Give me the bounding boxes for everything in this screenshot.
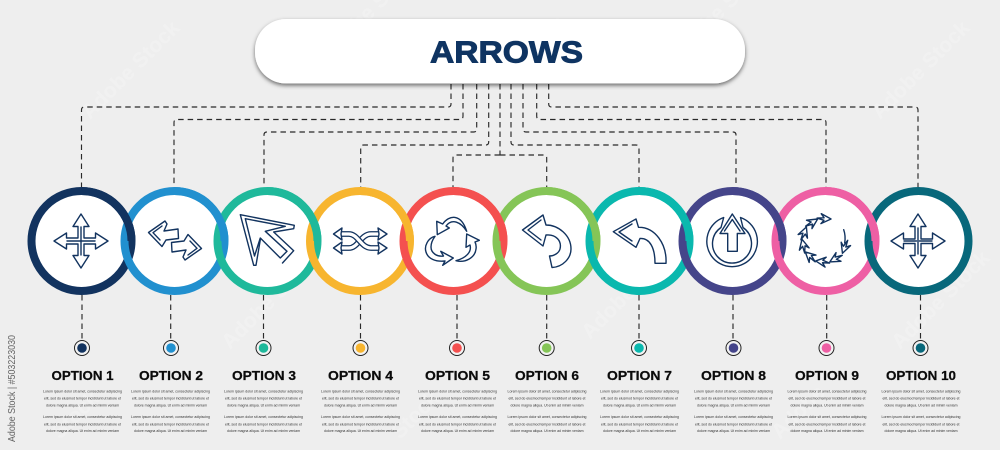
- text block: option 2: dolore magna aliqua. Ut enim ad minim veniam: [134, 402, 208, 408]
- text block: option 5: OPTION 5: [425, 368, 490, 383]
- text block: option 7: dolore magna aliqua. Ut enim ad minim veniam: [603, 428, 677, 433]
- text block: option 6: dolore magna aliqua. Ut enim ad minim veniam: [510, 402, 584, 408]
- text block: option 10: Lorem ipsum dolor sit amet, consectetur adipiscing: [882, 388, 960, 394]
- text block: option 10: dolore magna aliqua. Ut enim ad minim veniam: [884, 402, 958, 408]
- text block: option 6: Lorem ipsum dolor sit amet, consectetur adipiscing: [508, 388, 586, 394]
- text block: option 7: dolore magna aliqua. Ut enim ad minim veniam: [603, 402, 677, 408]
- text block: option 3: Lorem ipsum dolor sit amet, consectetur adipiscing: [224, 388, 303, 394]
- icon: curved left arrow: [613, 219, 666, 263]
- text block: option 5: elit, sed do eiusmod tempor incididunt ut labore et: [419, 395, 497, 400]
- text block: option 2: elit, sed do eiusmod tempor incididunt ut labore et: [132, 421, 210, 426]
- text block: option 2: dolore magna aliqua. Ut enim ad minim veniam: [134, 428, 208, 433]
- text block: option 10: dolore magna aliqua. Ut enim ad minim veniam: [884, 428, 958, 433]
- text block: option 8: [694, 368, 773, 433]
- icon: u-turn left arrow: [522, 215, 571, 268]
- text block: option 6: Lorem ipsum dolor sit amet, consectetur adipiscing: [508, 414, 586, 419]
- text block: option 5: [418, 368, 497, 433]
- text block: option 5: dolore magna aliqua. Ut enim ad minim veniam: [421, 428, 495, 433]
- option markers: [74, 340, 928, 356]
- vertical stock credit: Adobe Stock | #503223030: [6, 335, 18, 442]
- text block: option 3: Lorem ipsum dolor sit amet, consectetur adipiscing: [224, 414, 303, 419]
- text block: option 6: elit, sed do eiusmod tempor incididunt ut labore et: [508, 395, 586, 400]
- text block: option 4: [321, 368, 400, 433]
- icon: recycling arrows: [425, 217, 479, 265]
- text block: option 1: dolore magna aliqua. Ut enim ad minim veniam: [46, 402, 120, 408]
- text block: option 4: OPTION 4: [328, 368, 394, 383]
- icon: four-way arrows: [54, 214, 108, 268]
- text block: option 1: Lorem ipsum dolor sit amet, consectetur adipiscing: [43, 414, 122, 419]
- text block: option 9: OPTION 9: [795, 368, 859, 383]
- text block: option 7: OPTION 7: [607, 368, 672, 383]
- infographic canvas: Adobe: [507, 11, 570, 74]
- text block: option 10: [882, 368, 960, 433]
- text block: option 10: elit, sed do eiusmod tempor incididunt ut labore et: [882, 421, 960, 426]
- dashed connectors from title to circles: [82, 84, 920, 340]
- text block: option 8: elit, sed do eiusmod tempor incididunt ut labore et: [695, 421, 773, 426]
- text block: option 7: elit, sed do eiusmod tempor incididunt ut labore et: [601, 395, 679, 400]
- text block: option 3: elit, sed do eiusmod tempor incididunt ut labore et: [225, 395, 303, 400]
- text block: option 6: dolore magna aliqua. Ut enim ad minim veniam: [510, 428, 584, 433]
- text block: option 8: dolore magna aliqua. Ut enim ad minim veniam: [697, 428, 771, 433]
- text block: option 5: Lorem ipsum dolor sit amet, consectetur adipiscing: [418, 388, 497, 394]
- text block: option 1: dolore magna aliqua. Ut enim ad minim veniam: [46, 428, 120, 433]
- text block: option 9: Lorem ipsum dolor sit amet, consectetur adipiscing: [788, 388, 866, 394]
- text block: option 4: dolore magna aliqua. Ut enim ad minim veniam: [324, 428, 398, 433]
- text block: option 2: elit, sed do eiusmod tempor incididunt ut labore et: [132, 395, 210, 400]
- text block: option 5: elit, sed do eiusmod tempor incididunt ut labore et: [419, 421, 497, 426]
- text block: option 3: dolore magna aliqua. Ut enim ad minim veniam: [227, 428, 301, 433]
- text block: option 2: OPTION 2: [139, 368, 203, 383]
- infographic canvas: Adobe Stock: [217, 246, 325, 354]
- text block: option 9: elit, sed do eiusmod tempor incididunt ut labore et: [788, 421, 866, 426]
- text block: option 10: Lorem ipsum dolor sit amet, consectetur adipiscing: [882, 414, 960, 419]
- text block: option 2: Lorem ipsum dolor sit amet, consectetur adipiscing: [131, 414, 210, 419]
- infographic canvas: Adobe Stock: [577, 236, 685, 344]
- text block: option 8: Lorem ipsum dolor sit amet, consectetur adipiscing: [694, 388, 773, 394]
- text block: option 1: Lorem ipsum dolor sit amet, consectetur adipiscing: [43, 388, 122, 394]
- text block: option 3: dolore magna aliqua. Ut enim ad minim veniam: [227, 402, 301, 408]
- text block: option 6: OPTION 6: [515, 368, 579, 383]
- text block: option 9: [788, 368, 866, 433]
- text block: option 1: elit, sed do eiusmod tempor incididunt ut labore et: [44, 395, 122, 400]
- text block: option 3: OPTION 3: [232, 368, 296, 383]
- text block: option 4: elit, sed do eiusmod tempor incididunt ut labore et: [322, 395, 400, 400]
- text block: option 7: Lorem ipsum dolor sit amet, consectetur adipiscing: [600, 388, 679, 394]
- text block: option 6: [508, 368, 586, 433]
- text block: option 9: elit, sed do eiusmod tempor incididunt ut labore et: [788, 395, 866, 400]
- text block: option 5: Lorem ipsum dolor sit amet, consectetur adipiscing: [418, 414, 497, 419]
- text block: option 7: Lorem ipsum dolor sit amet, consectetur adipiscing: [600, 414, 679, 419]
- icon: shuffle arrows: [334, 228, 387, 254]
- text block: option 10: elit, sed do eiusmod tempor incididunt ut labore et: [882, 395, 960, 400]
- text block: option 1: OPTION 1: [52, 368, 114, 383]
- icon: power arrow: [707, 214, 757, 267]
- text block: option 2: [131, 368, 210, 433]
- infographic canvas: Adobe Stock: [867, 16, 975, 124]
- infographic canvas: Adobe: [767, 381, 830, 444]
- text block: option 4: dolore magna aliqua. Ut enim ad minim veniam: [324, 402, 398, 408]
- text block: option 8: dolore magna aliqua. Ut enim ad minim veniam: [697, 402, 771, 408]
- text block: option 4: Lorem ipsum dolor sit amet, consectetur adipiscing: [321, 414, 400, 419]
- text block: option 8: elit, sed do eiusmod tempor incididunt ut labore et: [695, 395, 773, 400]
- infographic canvas: Stock: [387, 387, 444, 444]
- text block: option 5: dolore magna aliqua. Ut enim ad minim veniam: [421, 402, 495, 408]
- text block: option 2: Lorem ipsum dolor sit amet, consectetur adipiscing: [131, 388, 210, 394]
- icon: four-way split arrows: [891, 214, 945, 268]
- text block: option 3: [224, 368, 303, 433]
- text block: option 9: Lorem ipsum dolor sit amet, consectetur adipiscing: [788, 414, 866, 419]
- text block: option 3: elit, sed do eiusmod tempor incididunt ut labore et: [225, 421, 303, 426]
- infographic canvas: Adobe Stock: [77, 16, 185, 124]
- icon: circular chain of arrows: [797, 214, 852, 268]
- text block: option 4: Lorem ipsum dolor sit amet, consectetur adipiscing: [321, 388, 400, 394]
- text block: option 1: [43, 368, 122, 433]
- icon: large cursor arrow: [240, 215, 294, 265]
- text block: option 7: elit, sed do eiusmod tempor incididunt ut labore et: [601, 421, 679, 426]
- infographic canvas: Adobe Stock: [887, 246, 995, 354]
- interlocking option circles: [32, 191, 968, 291]
- icon: opposing double arrows: [148, 221, 202, 260]
- text block: option 8: Lorem ipsum dolor sit amet, consectetur adipiscing: [694, 414, 773, 419]
- text block: option 8: OPTION 8: [701, 368, 766, 383]
- infographic canvas: Stock: [47, 387, 104, 444]
- text block: option 6: elit, sed do eiusmod tempor incididunt ut labore et: [508, 421, 586, 426]
- title pill: [255, 19, 745, 84]
- heading: ARROWS: ARROWS: [430, 35, 583, 70]
- text block: option 7: [600, 368, 679, 433]
- text block: option 9: dolore magna aliqua. Ut enim ad minim veniam: [790, 402, 864, 408]
- text block: option 10: OPTION 10: [886, 368, 956, 383]
- text block: option 9: dolore magna aliqua. Ut enim ad minim veniam: [790, 428, 864, 433]
- text block: option 1: elit, sed do eiusmod tempor incididunt ut labore et: [44, 421, 122, 426]
- text block: option 4: elit, sed do eiusmod tempor incididunt ut labore et: [322, 421, 400, 426]
